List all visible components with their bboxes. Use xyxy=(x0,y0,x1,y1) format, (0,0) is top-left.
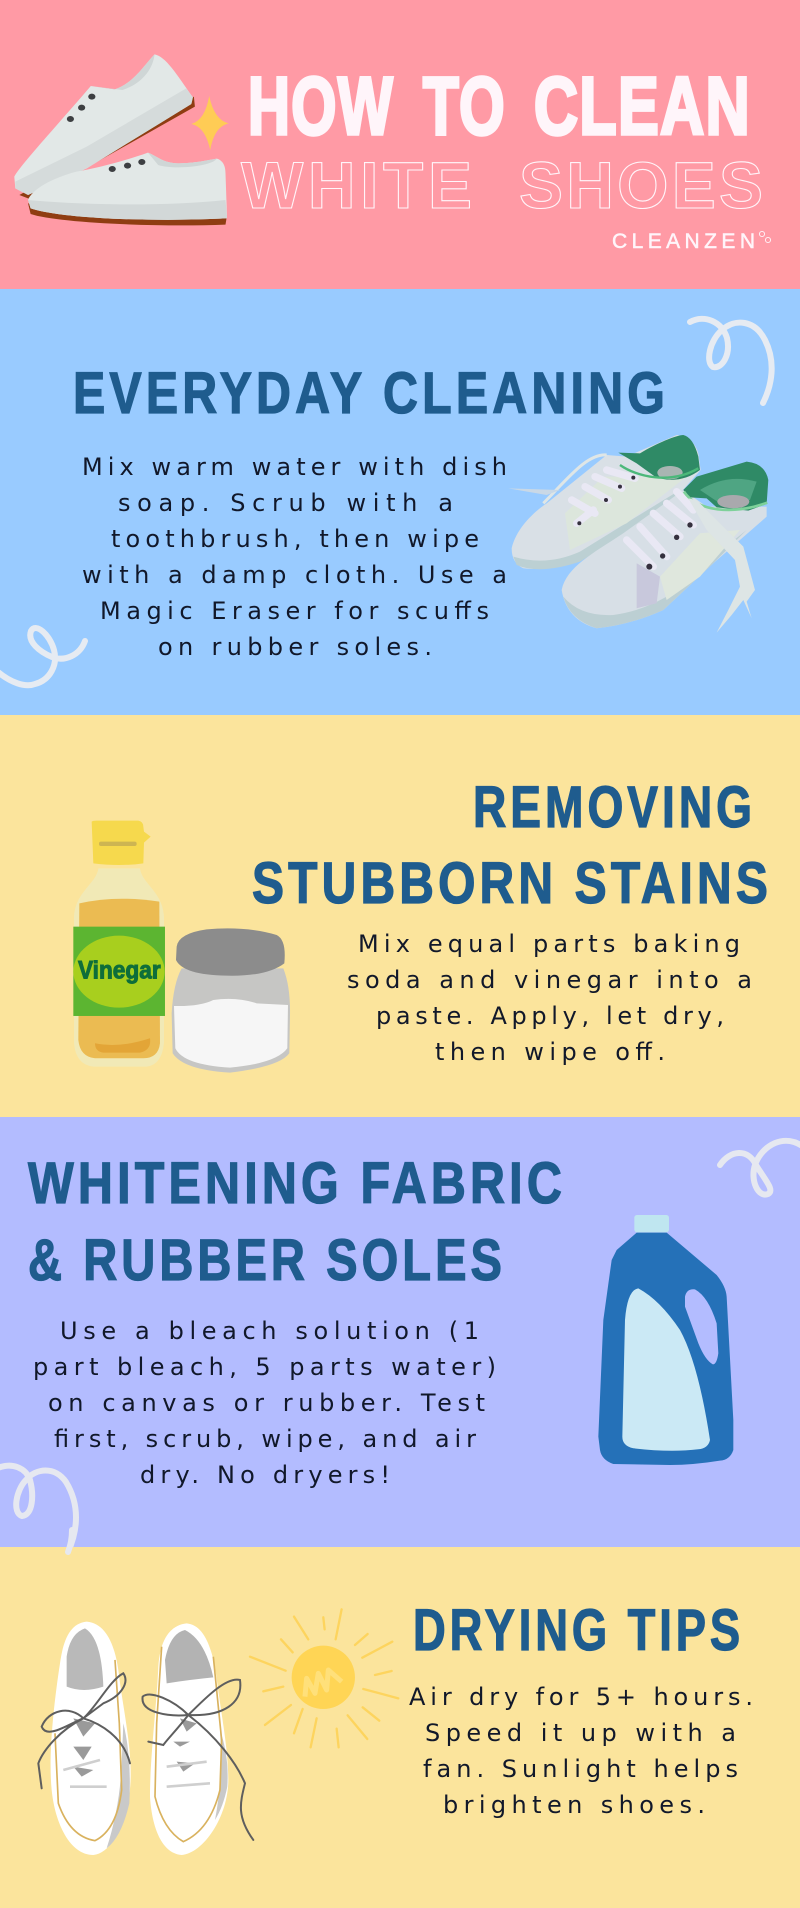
body text: dry. No dryers! xyxy=(140,1461,390,1489)
body text: Magic Eraser for scuffs xyxy=(100,597,489,625)
panel: drying tips xyxy=(0,1530,800,1908)
jar xyxy=(172,928,290,1073)
body text: Use a bleach solution (1 xyxy=(60,1317,479,1345)
title line: how to clean: TO xyxy=(423,61,506,152)
squiggle top right xyxy=(720,1141,800,1195)
heading: WHITENING FABRIC xyxy=(28,1151,566,1216)
squiggle bottom left xyxy=(0,1466,76,1552)
illustration: white shoes from above xyxy=(38,1622,253,1855)
title line: white shoes outlined: SHOES xyxy=(519,148,763,222)
body text: Mix warm water with dish xyxy=(82,453,507,481)
title line: how to clean: HOW xyxy=(248,61,394,152)
icon: pair of white sneakers with sparkle xyxy=(14,54,229,225)
illustration: watercolor sneakers xyxy=(508,435,768,633)
body text xyxy=(409,1683,753,1819)
heading xyxy=(252,775,772,916)
bottle xyxy=(73,821,165,1067)
illustration: bleach jug xyxy=(598,1215,733,1465)
bottle: Vinegar xyxy=(78,957,161,984)
body text xyxy=(82,453,507,661)
body text: soda and vinegar into a xyxy=(347,966,752,994)
body text: paste. Apply, let dry, xyxy=(376,1002,724,1030)
heading: & RUBBER SOLES xyxy=(28,1228,506,1293)
body text: soap. Scrub with a xyxy=(118,489,453,517)
body text: fan. Sunlight helps xyxy=(423,1755,738,1783)
squiggle top right xyxy=(690,319,772,403)
panel: header xyxy=(0,0,800,289)
body text: Mix equal parts baking xyxy=(358,930,740,958)
body text: brighten shoes. xyxy=(443,1791,705,1819)
body text: part bleach, 5 parts water) xyxy=(33,1353,496,1381)
body text: on rubber soles. xyxy=(158,633,432,661)
heading xyxy=(28,1151,566,1293)
body text: on canvas or rubber. Test xyxy=(48,1389,485,1417)
logo: cleanzen: CLEANZEN xyxy=(612,230,755,253)
illustration: vinegar bottle and baking soda jar xyxy=(73,821,290,1073)
body text: Air dry for 5+ hours. xyxy=(409,1683,753,1711)
panel: everyday cleaning xyxy=(0,289,800,715)
title line: white shoes outlined xyxy=(241,148,763,222)
body text: then wipe off. xyxy=(435,1038,665,1066)
illustration: sun xyxy=(250,1609,398,1747)
heading: EVERYDAY CLEANING xyxy=(73,361,669,426)
body text: with a damp cloth. Use a xyxy=(82,561,507,589)
title line: white shoes outlined: WHITE xyxy=(241,148,472,222)
body text xyxy=(347,930,752,1066)
panel: removing stubborn stains xyxy=(0,715,800,1117)
title line: how to clean xyxy=(248,61,751,152)
squiggle bottom left xyxy=(0,628,85,685)
body text xyxy=(33,1317,496,1489)
body text: toothbrush, then wipe xyxy=(111,525,479,553)
body text: first, scrub, wipe, and air xyxy=(54,1425,476,1453)
squiggle tail overlap xyxy=(68,1530,72,1552)
body text: Speed it up with a xyxy=(425,1719,736,1747)
panel: whitening fabric and rubber soles xyxy=(0,1117,800,1552)
